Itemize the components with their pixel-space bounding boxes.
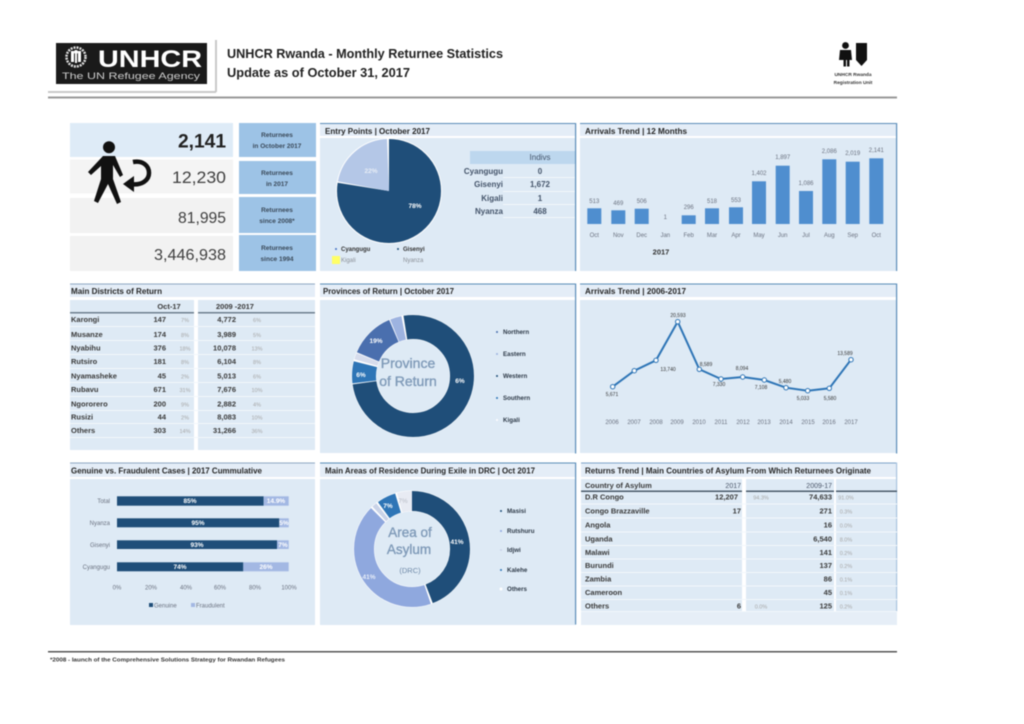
table: districts: 3,989 [217, 330, 236, 339]
stacked bar chart: 7% [278, 542, 288, 549]
table: countries: 6,540 [813, 534, 832, 544]
panel: arrivals trend 2006-2017 [580, 284, 897, 454]
table: districts: 6,104 [217, 357, 237, 366]
bar chart: Oct [590, 233, 599, 239]
donut chart: 6% [455, 378, 465, 385]
table: districts: 14% [179, 429, 191, 435]
table: countries: 271 [819, 506, 832, 516]
table: countries: 0.1% [840, 591, 852, 597]
panel: KPI summary [70, 123, 316, 271]
table: districts: 6% [253, 318, 261, 324]
heading: Returns Trend | Main Countries of Asylum From Which Returnees Originate [585, 466, 872, 476]
table: districts: 8,083 [217, 412, 236, 422]
stacked bar chart: 14.9% [267, 498, 285, 505]
donut centre label: Area of [388, 525, 432, 540]
heading: Entry Points | October 2017 [325, 127, 431, 136]
donut centre label: of Return [379, 373, 437, 389]
bar chart: Mar [707, 233, 717, 239]
table: countries: 45 [824, 588, 832, 597]
table: districts: 174 [153, 330, 167, 339]
stacked bar chart: 40% [180, 586, 193, 592]
table: entry point individuals: Indivs [530, 153, 550, 162]
table: districts: 376 [153, 344, 166, 352]
bar chart: 2017 [653, 248, 669, 256]
table: countries: Zambia [585, 574, 612, 584]
stacked bar chart: 80% [249, 586, 262, 592]
header band [48, 40, 897, 98]
legend: Rutshuru [507, 528, 535, 535]
pie chart: 22% [364, 168, 378, 175]
stacked bar chart: 74% [173, 564, 187, 571]
table: districts: 2009 -2017 [216, 302, 254, 311]
table: districts: Rutsiro [71, 357, 98, 366]
panel: KPI summary: Returnees [261, 207, 293, 214]
donut chart [362, 498, 464, 597]
title: Update as of October 31, 2017 [227, 65, 410, 80]
table: entry point individuals: Gisenyi [474, 180, 503, 189]
table: countries: 2009-17 [806, 483, 832, 490]
table: countries: 91.0% [838, 496, 854, 502]
table: entry point individuals: 1,672 [530, 180, 551, 189]
line chart: 2016 [822, 420, 836, 426]
bar chart: 296 [684, 205, 694, 211]
bar chart: Nov [613, 233, 624, 239]
panel: KPI summary: since 2008* [259, 218, 295, 225]
legend: Idjwi [507, 547, 521, 554]
line chart: 7,108 [755, 385, 767, 391]
stacked bar chart: 20% [145, 586, 158, 592]
table: entry point individuals: Nyanza [475, 207, 504, 216]
table: entry point individuals: 0 [538, 167, 543, 176]
table: entry point individuals: 1 [538, 194, 543, 203]
footer line [48, 651, 897, 652]
panel: KPI summary: 3,446,938 [154, 247, 226, 264]
table: districts: Musanze [71, 330, 103, 339]
table: countries: Uganda [585, 534, 613, 544]
stacked bar chart: Gisenyi [90, 543, 110, 549]
donut centre label [387, 525, 432, 575]
table: countries: Congo Brazzaville [585, 506, 650, 516]
legend [500, 508, 535, 593]
heading: Main Districts of Return [71, 287, 162, 296]
table: countries: 86 [824, 574, 832, 584]
table: countries: 0.3% [840, 510, 852, 516]
table: districts: Ngororero [71, 400, 108, 408]
line chart: 8,094 [736, 366, 748, 372]
table: countries: 74,633 [809, 492, 832, 502]
stacked bar chart: Nyanza [90, 521, 111, 527]
donut chart: 41% [450, 539, 464, 546]
icon: registration unit: UNHCR Rwanda [834, 72, 872, 78]
table: districts: 181 [153, 357, 166, 366]
bar chart: 1,086 [798, 181, 814, 187]
donut centre label: Asylum [387, 542, 431, 557]
panel: KPI summary: Returnees [261, 132, 293, 139]
table: countries: 0.1% [840, 578, 852, 584]
bar chart: Jan [660, 233, 670, 239]
bar chart: 1 [664, 215, 668, 221]
table: districts: 7% [181, 318, 189, 324]
legend: Kigali [503, 417, 520, 424]
donut chart: 7% [398, 498, 408, 505]
table: countries: 8.0% [840, 538, 852, 544]
table: countries: 137 [819, 561, 832, 570]
stacked bar chart: 93% [190, 542, 204, 549]
stacked bar chart: 95% [191, 520, 205, 527]
donut chart: 19% [369, 338, 383, 345]
bar chart: Jun [778, 233, 788, 239]
line chart: 2015 [801, 420, 815, 426]
bar chart: 1,402 [751, 171, 767, 177]
table: districts: 4% [253, 402, 261, 408]
stacked bar chart: 85% [183, 498, 197, 505]
table: entry point individuals: 468 [533, 207, 547, 216]
stacked bar chart: 60% [214, 586, 227, 592]
table: districts: 8% [181, 360, 189, 366]
icon: registration unit: Registration Unit [834, 80, 873, 86]
title [227, 46, 503, 80]
panel: KPI summary: in 2017 [266, 181, 288, 188]
line chart: 2014 [779, 420, 793, 426]
stacked bar chart: 5% [279, 520, 289, 527]
stacked bar chart: 100% [281, 586, 297, 592]
table: districts: 2% [181, 374, 189, 380]
panel: entry points [320, 123, 576, 271]
donut centre label [379, 355, 437, 389]
panel: KPI summary: 81,995 [178, 210, 226, 227]
table: countries: Others [585, 602, 609, 610]
line chart: 2009 [670, 420, 684, 426]
table: districts: 8% [253, 360, 261, 366]
table: districts: 5% [253, 333, 261, 339]
donut chart: 6% [356, 372, 366, 379]
donut chart: 41% [362, 574, 376, 581]
table: districts: 10,078 [213, 344, 236, 352]
bar chart [587, 148, 884, 256]
icon: registration unit [834, 42, 873, 86]
table: districts: 45 [158, 372, 166, 380]
table: countries: 0.0% [840, 524, 852, 530]
panel: returns trend countries of asylum [581, 462, 897, 625]
title: UNHCR Rwanda - Monthly Returnee Statistics [227, 46, 503, 61]
table: entry point individuals: Kigali [481, 194, 503, 203]
table: districts: 44 [158, 412, 167, 422]
table: countries: 17 [733, 506, 741, 516]
line chart: 5,671 [606, 392, 618, 398]
bar chart: 506 [637, 199, 647, 205]
line chart: 5,580 [824, 396, 836, 402]
bar chart: 469 [613, 201, 624, 207]
table: districts: Karongi [71, 315, 99, 324]
table: countries: 141 [819, 548, 832, 557]
bar chart: 518 [707, 199, 718, 205]
panel: main areas of residence [320, 462, 576, 625]
bar chart: Oct [872, 233, 881, 239]
stacked bar chart: Total [97, 499, 110, 505]
panel: provinces of return [320, 284, 576, 454]
stacked bar chart: Cyangugu [83, 565, 110, 571]
table: districts: 8% [181, 333, 189, 339]
bar chart: 2,019 [845, 151, 861, 157]
table: districts: 18% [179, 346, 191, 352]
legend: Southern [503, 395, 530, 402]
line chart: 2010 [692, 420, 706, 426]
panel: genuine vs fraudulent [70, 462, 315, 625]
bar chart: 2,141 [869, 148, 884, 154]
logo: UNHCR: UNHCR [98, 46, 202, 73]
legend [496, 329, 530, 424]
table: countries: 6 [737, 602, 741, 610]
donut centre label: Province [381, 355, 435, 371]
line chart: 2008 [649, 420, 663, 426]
table: districts: Nyabihu [71, 344, 101, 352]
legend: Northern [503, 329, 529, 336]
table: districts: 5,013 [217, 372, 236, 380]
table: countries: Cameroon [585, 588, 623, 597]
table: districts: 671 [153, 385, 166, 394]
stacked bar chart [83, 496, 297, 610]
bar chart: Sep [847, 233, 859, 239]
panel: KPI summary: Returnees [261, 245, 293, 252]
table: districts: 303 [153, 426, 166, 435]
logo: UNHCR [56, 43, 207, 84]
table: districts: 147 [153, 315, 166, 324]
bar chart: Aug [824, 233, 835, 239]
table: countries: 16 [824, 520, 832, 530]
line chart: 7,330 [713, 382, 725, 388]
table: countries: Angola [585, 520, 611, 530]
panel: KPI summary: in October 2017 [253, 143, 302, 150]
heading: Arrivals Trend | 12 Months [585, 127, 688, 136]
line chart: 2007 [627, 420, 641, 426]
table: districts: 13% [251, 346, 263, 352]
table: countries: 94.3% [753, 496, 769, 502]
donut centre label: (DRC) [399, 566, 421, 575]
table: districts: 2,882 [217, 400, 236, 408]
bar chart: 1,897 [775, 155, 791, 161]
line chart: 5,033 [797, 396, 809, 402]
table: districts: 2% [181, 416, 189, 422]
line chart: 13,740 [660, 367, 676, 373]
legend [149, 603, 225, 610]
legend: Fraudulent [196, 604, 225, 610]
bar chart: May [753, 233, 765, 239]
pie chart: 78% [408, 203, 422, 210]
legend [332, 247, 425, 264]
line chart: 8,589 [700, 362, 712, 368]
line chart: 2012 [736, 420, 750, 426]
table: countries: 0.2% [840, 551, 852, 557]
panel: main districts of return [70, 284, 315, 450]
table: countries: 0.0% [755, 604, 767, 610]
panel: arrivals trend 12 months [580, 123, 897, 271]
legend: Cyangugu [341, 247, 371, 253]
legend: Genuine [154, 604, 177, 610]
donut chart: 7% [383, 503, 393, 510]
legend: Nyanza [403, 258, 424, 264]
table: districts: Rusizi [71, 412, 93, 422]
table: countries: 0.2% [840, 564, 852, 570]
panel: KPI summary: 2,141 [178, 132, 226, 152]
table: districts: 10% [251, 388, 263, 394]
logo: UNHCR: The UN Refugee Agency [62, 71, 200, 82]
bar chart: Jul [802, 233, 810, 239]
table: districts: 10% [251, 416, 263, 422]
table: countries: 2017 [725, 483, 741, 490]
table: districts: 4,772 [217, 315, 236, 324]
legend: Gisenyi [403, 247, 425, 253]
table: districts: Others [71, 426, 95, 435]
table: districts: 7,676 [217, 385, 236, 394]
table: districts: 200 [153, 400, 166, 408]
line chart: 13,589 [837, 351, 853, 357]
table: entry point individuals: Cyangugu [464, 167, 503, 176]
footnote: *2008 - launch of the Comprehensive Solutions Strategy for Rwandan Refugees [50, 658, 285, 664]
line chart: 2017 [844, 420, 858, 426]
table: countries: 12,207 [715, 492, 738, 502]
table: districts [71, 302, 263, 435]
table: countries: Country of Asylum [585, 481, 652, 490]
line chart [605, 313, 858, 426]
table: districts: Nyamasheke [71, 372, 117, 380]
legend: Others [507, 586, 528, 593]
table: districts: Oct-17 [157, 302, 181, 311]
line chart: 2013 [757, 420, 771, 426]
panel: KPI summary: Returnees [261, 170, 293, 177]
legend: Kalehe [507, 567, 528, 574]
line chart: 2006 [605, 420, 619, 426]
table: countries: 0.2% [840, 604, 852, 610]
bar chart: Feb [684, 233, 695, 239]
table: districts: 6% [253, 374, 261, 380]
bar chart: Dec [636, 233, 647, 239]
table: countries: D.R Congo [585, 492, 624, 502]
line chart: 20,593 [670, 313, 686, 319]
legend: Masisi [507, 508, 526, 515]
line chart: 5,480 [779, 379, 791, 385]
table: entry point individuals [464, 151, 575, 218]
panel: KPI summary: 12,230 [172, 168, 226, 187]
table: districts: Rubavu [71, 385, 99, 394]
pie chart [336, 138, 442, 244]
table: countries: 125 [819, 602, 832, 610]
table: districts: 36% [251, 429, 263, 435]
stacked bar chart: 0% [113, 586, 122, 592]
bar chart: 553 [731, 198, 742, 204]
heading: Arrivals Trend | 2006-2017 [585, 287, 687, 296]
bar chart: 513 [589, 199, 600, 205]
table: districts: 31% [179, 388, 191, 394]
legend: Kigali [341, 258, 356, 264]
heading: Provinces of Return | October 2017 [323, 287, 455, 296]
legend: Eastern [503, 351, 526, 358]
table: districts: 9% [181, 402, 189, 408]
bar chart: Apr [731, 233, 741, 239]
table: countries: Malawi [585, 548, 610, 557]
icon: returnee walking with return arrow [88, 141, 149, 204]
panel: KPI summary: since 1994 [261, 256, 294, 263]
donut chart [356, 327, 465, 425]
table: countries: Burundi [585, 561, 614, 570]
bar chart: 2,086 [822, 149, 837, 155]
legend: Western [503, 373, 528, 380]
line chart: 2011 [715, 420, 728, 426]
table: countries [585, 481, 854, 610]
heading: Genuine vs. Fraudulent Cases | 2017 Cummulative [71, 466, 263, 476]
stacked bar chart: 26% [259, 564, 273, 571]
table: districts: 31,266 [213, 426, 236, 435]
heading: Main Areas of Residence During Exile in DRC | Oct 2017 [325, 466, 536, 476]
